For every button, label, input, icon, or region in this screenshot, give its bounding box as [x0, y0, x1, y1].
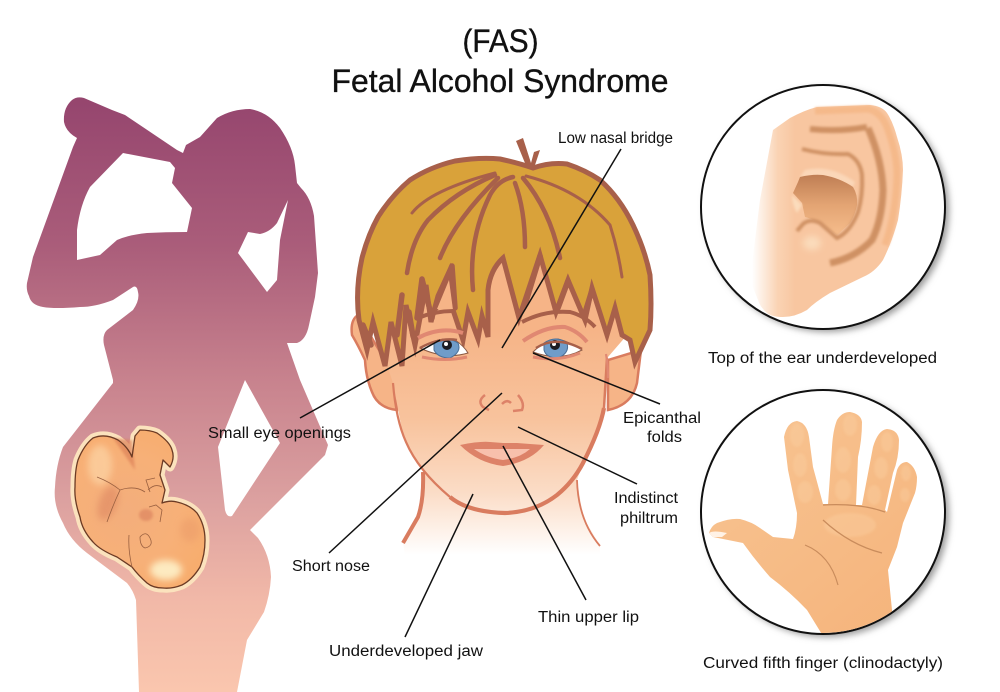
leader lines: [300, 149, 660, 637]
ear circle: [701, 85, 949, 332]
right eye: [533, 339, 582, 359]
neck and face fill: [372, 250, 640, 555]
neck lines: [403, 472, 423, 543]
hand circle: [701, 390, 949, 640]
fetus: [75, 430, 205, 588]
title: [332, 23, 668, 99]
labels: Thin upper lip: [538, 609, 639, 626]
labels: Low nasal bridge: [558, 130, 673, 147]
fetus outline: [75, 430, 205, 588]
nose: [480, 395, 523, 411]
labels: Indistinct: [614, 490, 679, 507]
lips: [460, 442, 544, 466]
hair skin window: [437, 280, 453, 310]
fetus shading: [93, 483, 123, 523]
left eye: [420, 339, 468, 360]
labels: Short nose: [292, 558, 370, 575]
silhouette: pregnant woman drinking from a bottle: [27, 97, 328, 692]
finger joints and palm creases: [790, 414, 911, 537]
title: Fetal Alcohol Syndrome: [332, 63, 668, 99]
labels: Small eye openings: [208, 425, 351, 442]
labels: philtrum: [620, 510, 678, 527]
cheek line: [606, 354, 608, 378]
title: (FAS): [462, 23, 538, 59]
eyebrows: [418, 311, 595, 327]
labels: Underdeveloped jaw: [329, 643, 484, 660]
ears: [352, 315, 397, 410]
head and neck: [352, 138, 651, 555]
hand: [709, 412, 917, 640]
fetus limbs and ear lines: [97, 477, 162, 567]
hair strands: [407, 175, 560, 290]
hair dark fringe strokes: [363, 256, 592, 345]
hair tuft: [516, 138, 540, 168]
ear: [750, 105, 903, 317]
labels: Top of the ear underdeveloped: [708, 350, 937, 367]
labels: Epicanthal: [623, 410, 701, 427]
labels: [208, 130, 943, 672]
labels: folds: [647, 429, 682, 446]
labels: Curved fifth finger (clinodactyly): [703, 655, 943, 672]
hair: [358, 158, 651, 366]
eyelid creases: [418, 327, 587, 342]
jaw outline: [393, 383, 450, 497]
fetus body: [75, 430, 205, 588]
